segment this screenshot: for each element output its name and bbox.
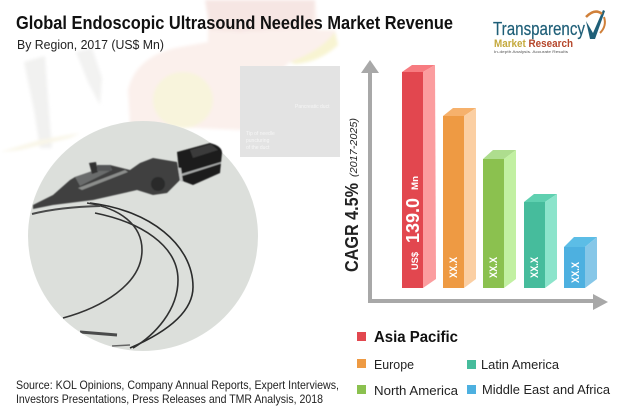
- bar: Middle East and Africa: XX.X: [570, 261, 582, 283]
- legend: Latin America: Latin America: [481, 358, 559, 372]
- source note: [16, 378, 339, 406]
- logo: Transparency Market Research: Market Research: [494, 38, 573, 50]
- axes: [361, 60, 608, 310]
- panel: faded ultrasound image: Tip of needle: [246, 131, 275, 137]
- panel: faded ultrasound image: [240, 66, 340, 157]
- bar: Asia Pacific: 139.0: [403, 198, 423, 243]
- legend: Europe: [357, 358, 414, 372]
- bar: Asia Pacific: US$: [410, 251, 421, 270]
- bar: Latin America: XX.X: [529, 256, 541, 278]
- bar: Middle East and Africa: [564, 237, 597, 288]
- legend: Asia Pacific: Asia Pacific: [374, 329, 458, 346]
- cable: outer loop: [90, 203, 193, 348]
- panel: faded ultrasound image: puncturing: [246, 138, 270, 144]
- tube end: [80, 332, 117, 335]
- bar: Asia Pacific: [402, 65, 436, 288]
- legend: [357, 329, 610, 398]
- bar: Europe: XX.X: [448, 256, 460, 278]
- bar: Asia Pacific: Mn: [410, 176, 421, 190]
- legend: Europe: Europe: [374, 358, 414, 372]
- cable: middle loop: [95, 213, 178, 348]
- logo: Transparency Market Research: Transparency: [493, 19, 585, 39]
- panel: faded ultrasound image: Pancreatic duct: [295, 104, 330, 110]
- panel: faded ultrasound image: of the duct: [246, 145, 270, 151]
- bar chart: [402, 65, 597, 288]
- icon: check mark: [586, 10, 605, 39]
- logo: Transparency Market Research: [493, 10, 605, 54]
- logo: Transparency Market Research: In-depth Analysis. Accurate Results: [494, 49, 568, 54]
- bar: Latin America: [524, 194, 557, 288]
- endoscope body: [33, 143, 222, 209]
- photo: endoscope in circle: [28, 121, 258, 351]
- source note: Investors Presentations, Press Releases and TMR Analysis, 2018: [16, 392, 323, 406]
- CAGR label: (2017-2025): [348, 118, 360, 177]
- legend: Middle East and Africa: Middle East and Africa: [482, 383, 610, 397]
- bar: North America: [483, 150, 516, 288]
- title: Global Endoscopic Ultrasound Needles Market Revenue: [16, 13, 453, 33]
- background: faded anatomy illustration: [0, 0, 338, 152]
- bar: North America: XX.X: [488, 256, 500, 278]
- bar: Europe: [443, 108, 476, 288]
- legend: North America: North America: [374, 384, 458, 398]
- CAGR label: [342, 118, 362, 272]
- source note: Source: KOL Opinions, Company Annual Reports, Expert Interviews,: [16, 378, 339, 392]
- CAGR label: CAGR 4.5%: [342, 183, 362, 272]
- subtitle: By Region, 2017 (US$ Mn): [17, 37, 164, 52]
- cable: left tube: [32, 206, 100, 214]
- cable: inner loop: [63, 203, 142, 318]
- x axis arrow: [368, 294, 608, 310]
- y axis arrow: [361, 60, 379, 302]
